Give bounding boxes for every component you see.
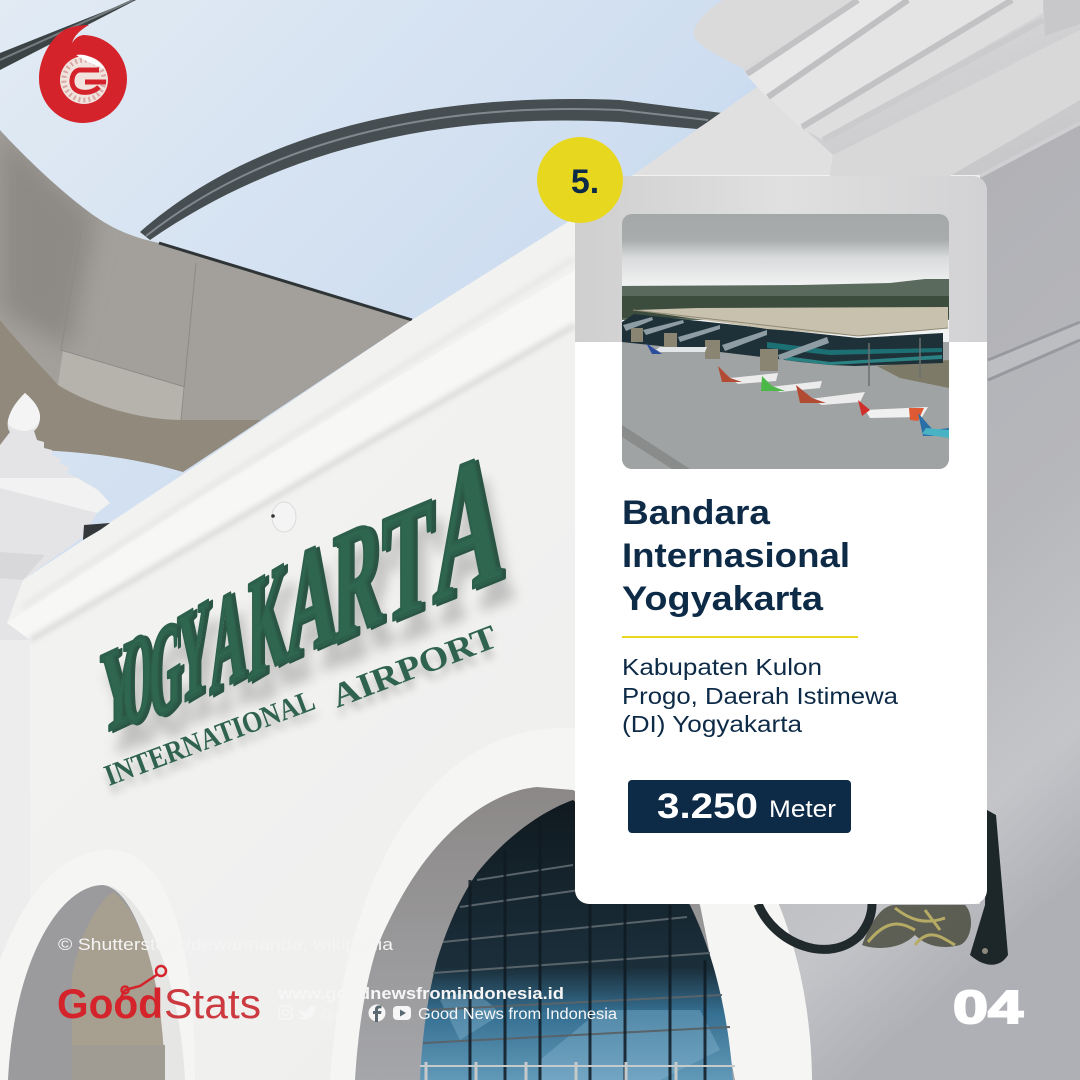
apron — [622, 342, 949, 469]
runway length badge — [628, 780, 851, 833]
card body — [575, 176, 987, 904]
runway length badge: 3.250 — [657, 787, 758, 826]
GoodStats logo: Good — [57, 980, 163, 1027]
parked planes — [646, 343, 949, 438]
terminal building — [622, 314, 943, 366]
YOGYAKARTA letters: A — [432, 407, 502, 646]
YOGYAKARTA letters: A — [209, 555, 245, 725]
card title: Yogyakarta — [622, 580, 824, 618]
website and social handles: Good News from Indonesia — [418, 1006, 617, 1023]
logo: red G badge — [39, 25, 127, 123]
runway length badge: Meter — [769, 796, 836, 823]
YOGYAKARTA letters: G — [149, 588, 181, 750]
info card — [537, 137, 987, 904]
website and social handles — [277, 984, 617, 1023]
card title — [622, 494, 850, 618]
youtube icon — [393, 1006, 411, 1020]
YOGYAKARTA letters: R — [332, 480, 382, 678]
iron lantern bracket — [758, 810, 1008, 965]
card title: Internasional — [622, 537, 850, 575]
glass reflections — [440, 994, 720, 1080]
roof rib arcs — [0, 0, 722, 240]
right wall moulding — [988, 320, 1080, 380]
airport sign lettering — [100, 407, 503, 793]
YOGYAKARTA letters: Y — [177, 569, 209, 734]
security camera — [271, 502, 296, 532]
YOGYAKARTA letters: K — [248, 530, 286, 714]
location text: (DI) Yogyakarta — [622, 711, 802, 737]
location text — [622, 654, 898, 737]
yellow title divider — [622, 636, 858, 638]
YOGYAKARTA letters: O — [123, 601, 151, 758]
website and social handles: www.goodnewsfromindonesia.id — [277, 984, 564, 1003]
upper right cornice — [633, 0, 1080, 176]
wall moulding — [0, 258, 575, 660]
INTERNATIONAL AIRPORT letters: AIRPORT — [327, 618, 503, 715]
number badge: 5. — [571, 163, 599, 201]
instagram and twitter icons — [279, 1006, 316, 1020]
location text: Kabupaten Kulon — [622, 654, 822, 680]
location text: Progo, Daerah Istimewa — [622, 683, 898, 709]
page number: 04 — [953, 981, 1024, 1033]
logo graph line — [118, 966, 166, 1003]
YOGYAKARTA letters — [100, 407, 502, 760]
INTERNATIONAL AIRPORT letters — [100, 618, 503, 793]
YOGYAKARTA letters: A — [285, 503, 335, 694]
card title: Bandara — [622, 494, 771, 532]
website and social handles: @gnfi — [320, 1006, 358, 1022]
left arch — [0, 850, 195, 1080]
GoodStats logo — [57, 966, 261, 1027]
facebook icon — [368, 1004, 386, 1022]
right grey wall — [757, 123, 1080, 1080]
number badge — [537, 137, 623, 223]
left finial tower — [0, 393, 110, 1080]
YOGYAKARTA letters: T — [382, 464, 432, 660]
concrete overhang — [0, 120, 420, 480]
photo credit: © Shutterstock/dewannanda, wikipedia — [58, 936, 394, 954]
airport photo — [622, 214, 949, 469]
right arch — [330, 728, 812, 1080]
YOGYAKARTA letters: Y — [100, 613, 136, 760]
INTERNATIONAL AIRPORT letters: INTERNATIONAL — [100, 684, 319, 793]
GoodStats logo: Stats — [164, 980, 261, 1027]
